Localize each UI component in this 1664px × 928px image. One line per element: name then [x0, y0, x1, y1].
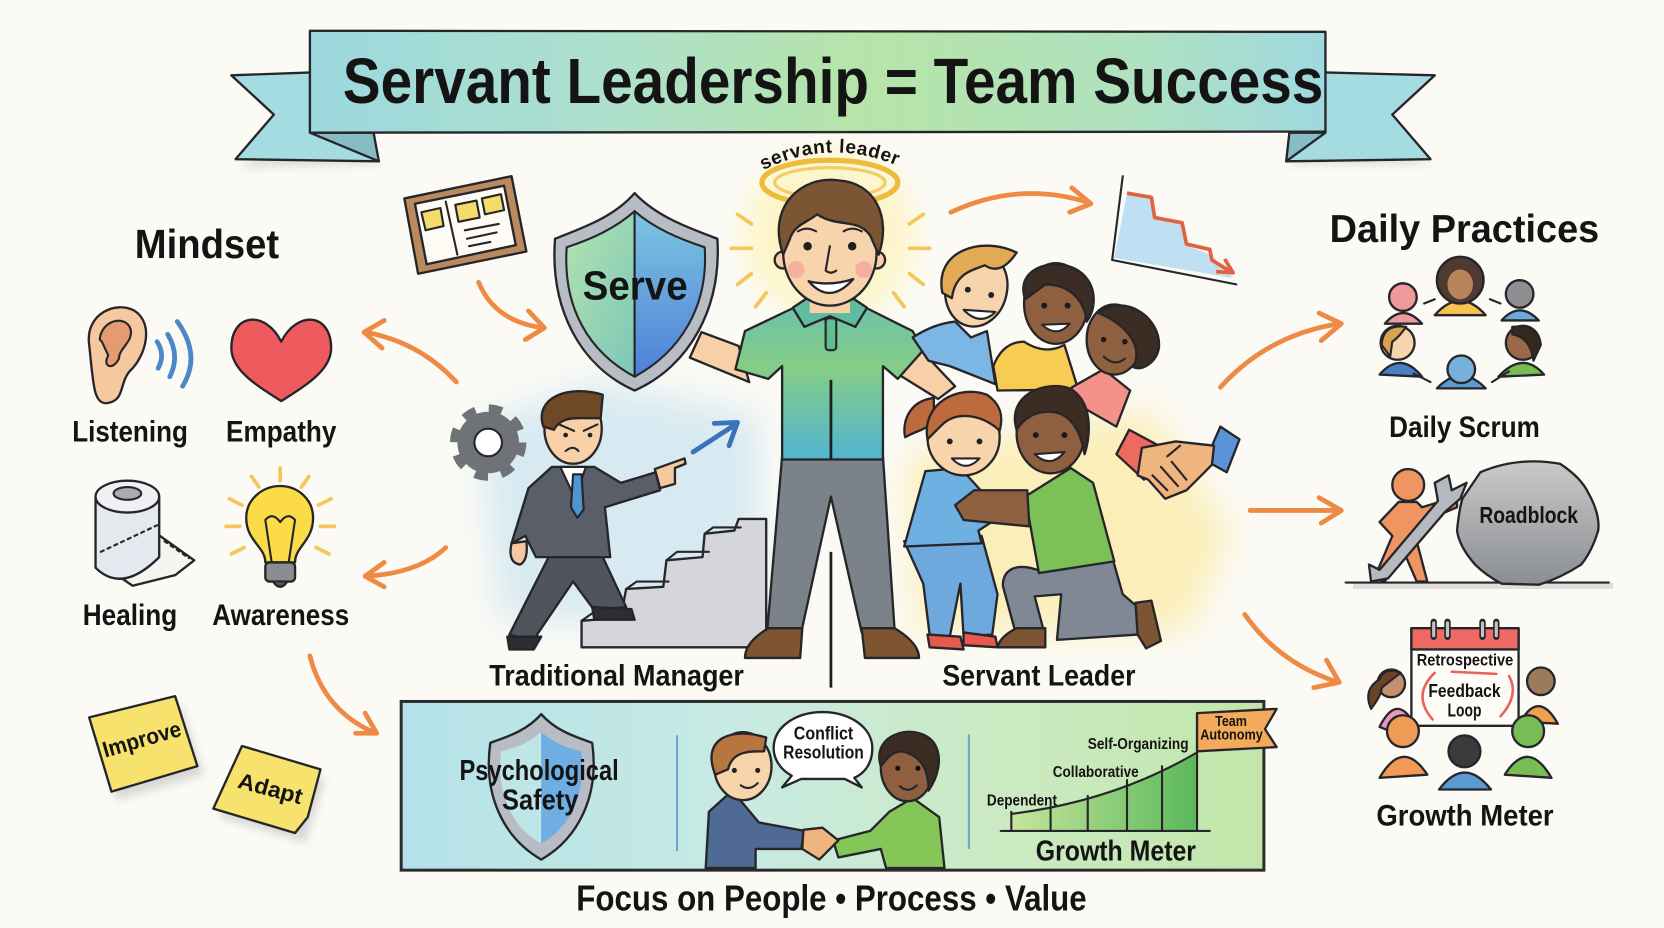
label: Retrospective: Retrospective	[1417, 650, 1513, 669]
shirt	[735, 308, 923, 459]
person right	[1521, 706, 1558, 724]
label: Listening: Listening	[72, 415, 188, 448]
hands	[802, 828, 838, 860]
arrow: blue upward	[693, 422, 738, 452]
child head	[904, 398, 934, 437]
arrow: to retrospective	[1245, 614, 1339, 688]
label: Awareness: Awareness	[212, 599, 349, 632]
person pink	[1385, 313, 1422, 324]
label: Growth Meter: Growth Meter	[1376, 800, 1554, 833]
people front	[1380, 757, 1427, 778]
label: Conflict: Conflict	[794, 724, 853, 744]
suit	[512, 467, 660, 557]
icon: light bulb	[226, 468, 334, 587]
icon: handshake	[1116, 427, 1239, 499]
flag: team autonomy	[1197, 709, 1277, 751]
arrow: to roadblock	[1250, 498, 1341, 523]
arrow: to awareness	[365, 548, 446, 587]
arrow: to empathy	[364, 320, 456, 382]
kneeling man head	[1017, 393, 1085, 473]
kneeling man shirt	[1025, 468, 1114, 573]
flag: team autonomy: Team	[1215, 714, 1247, 730]
neck and head	[810, 287, 850, 313]
pants	[767, 456, 895, 632]
girl left	[1380, 709, 1411, 738]
chart: growth meter: Dependent	[987, 792, 1058, 809]
stairs	[582, 519, 766, 647]
center divider	[830, 380, 832, 688]
icon: roadblock with wrench	[1346, 461, 1613, 589]
title text: Servant Leadership = Team Success	[343, 46, 1323, 117]
icon: gear	[455, 410, 521, 475]
label: Servant Leader: Servant Leader	[942, 660, 1136, 693]
kneeling man arms	[955, 490, 1029, 526]
arrow: to bottom panel	[310, 656, 377, 733]
sticky note: Adapt	[213, 746, 325, 843]
halo glow	[724, 129, 936, 342]
illustration: traditional manager with stairs	[507, 391, 766, 649]
label: Psychological: Psychological	[460, 755, 619, 787]
label: Serve: Serve	[583, 262, 688, 308]
child shirt	[904, 468, 1003, 547]
chart: growth meter: Collaborative	[1053, 764, 1139, 781]
kneeling man legs	[1003, 557, 1138, 640]
icon: retrospective calendar	[1368, 622, 1558, 790]
background wash: servant side	[907, 409, 1231, 631]
icon: bandage roll	[96, 481, 194, 586]
person blond	[1380, 363, 1422, 377]
label: Loop: Loop	[1447, 700, 1481, 720]
chart: growth meter	[987, 722, 1210, 868]
chart: growth meter: Growth Meter	[1036, 836, 1196, 868]
icon: psychological safety shield	[460, 714, 619, 860]
label: Roadblock: Roadblock	[1479, 502, 1578, 528]
label: Healing: Healing	[83, 599, 177, 632]
label: servant leader: servant leader	[760, 138, 900, 169]
person dark	[1498, 363, 1544, 377]
chart labels: Self-Organizing	[1088, 736, 1189, 753]
label: Feedback: Feedback	[1428, 681, 1501, 701]
figure	[1392, 469, 1424, 501]
dark-haired man	[993, 342, 1078, 391]
shoes	[745, 628, 802, 658]
arms	[690, 332, 749, 382]
illustration: servant leader helping child	[904, 386, 1161, 649]
blond man	[913, 322, 995, 384]
icon: kanban board	[404, 176, 526, 274]
icon: daily scrum circle	[1380, 257, 1544, 388]
speech bubble	[774, 712, 872, 787]
icon: ear with sound waves	[89, 307, 191, 403]
legs	[509, 541, 626, 641]
head	[544, 394, 602, 464]
arrow: to chart	[951, 188, 1091, 212]
sticky note: Improve	[89, 696, 204, 800]
person gray	[1502, 310, 1539, 320]
title banner	[231, 31, 1435, 168]
heading: Daily Practices: Daily Practices	[1330, 207, 1599, 251]
icon: serve shield	[554, 193, 718, 391]
flag: team autonomy: Autonomy	[1200, 728, 1263, 744]
pointing hand	[655, 458, 686, 488]
sticky note: Adapt: Adapt	[235, 768, 306, 809]
heading: Mindset: Mindset	[135, 221, 279, 267]
label: Safety: Safety	[502, 785, 578, 817]
arrow: to daily scrum	[1220, 313, 1341, 387]
background wash: traditional side	[478, 382, 759, 621]
person blue	[1437, 376, 1486, 388]
friend body	[833, 798, 944, 868]
icon: heart	[231, 320, 331, 401]
rock	[1457, 461, 1598, 585]
sticky note: Improve: Improve	[100, 716, 184, 762]
girl	[1072, 369, 1130, 427]
illustration: servant leader central figure	[688, 132, 956, 660]
illustration: conflict resolution handshake	[706, 712, 944, 868]
label: Daily Scrum: Daily Scrum	[1389, 411, 1540, 444]
arrow: board to shield	[479, 282, 544, 340]
illustration: team members	[913, 245, 1159, 427]
panel: bottom strip	[401, 701, 1277, 870]
label: Traditional Manager: Traditional Manager	[489, 660, 744, 693]
child legs and shoes	[904, 536, 998, 637]
icon: declining chart	[1112, 176, 1236, 284]
label: Empathy: Empathy	[226, 415, 337, 448]
manager body	[706, 791, 804, 868]
person top	[1435, 301, 1486, 315]
wrench	[1369, 475, 1467, 582]
tagline: Focus on People • Process • Value	[576, 877, 1087, 918]
label: Resolution: Resolution	[783, 743, 864, 763]
feedback loop arrows	[1423, 672, 1513, 719]
